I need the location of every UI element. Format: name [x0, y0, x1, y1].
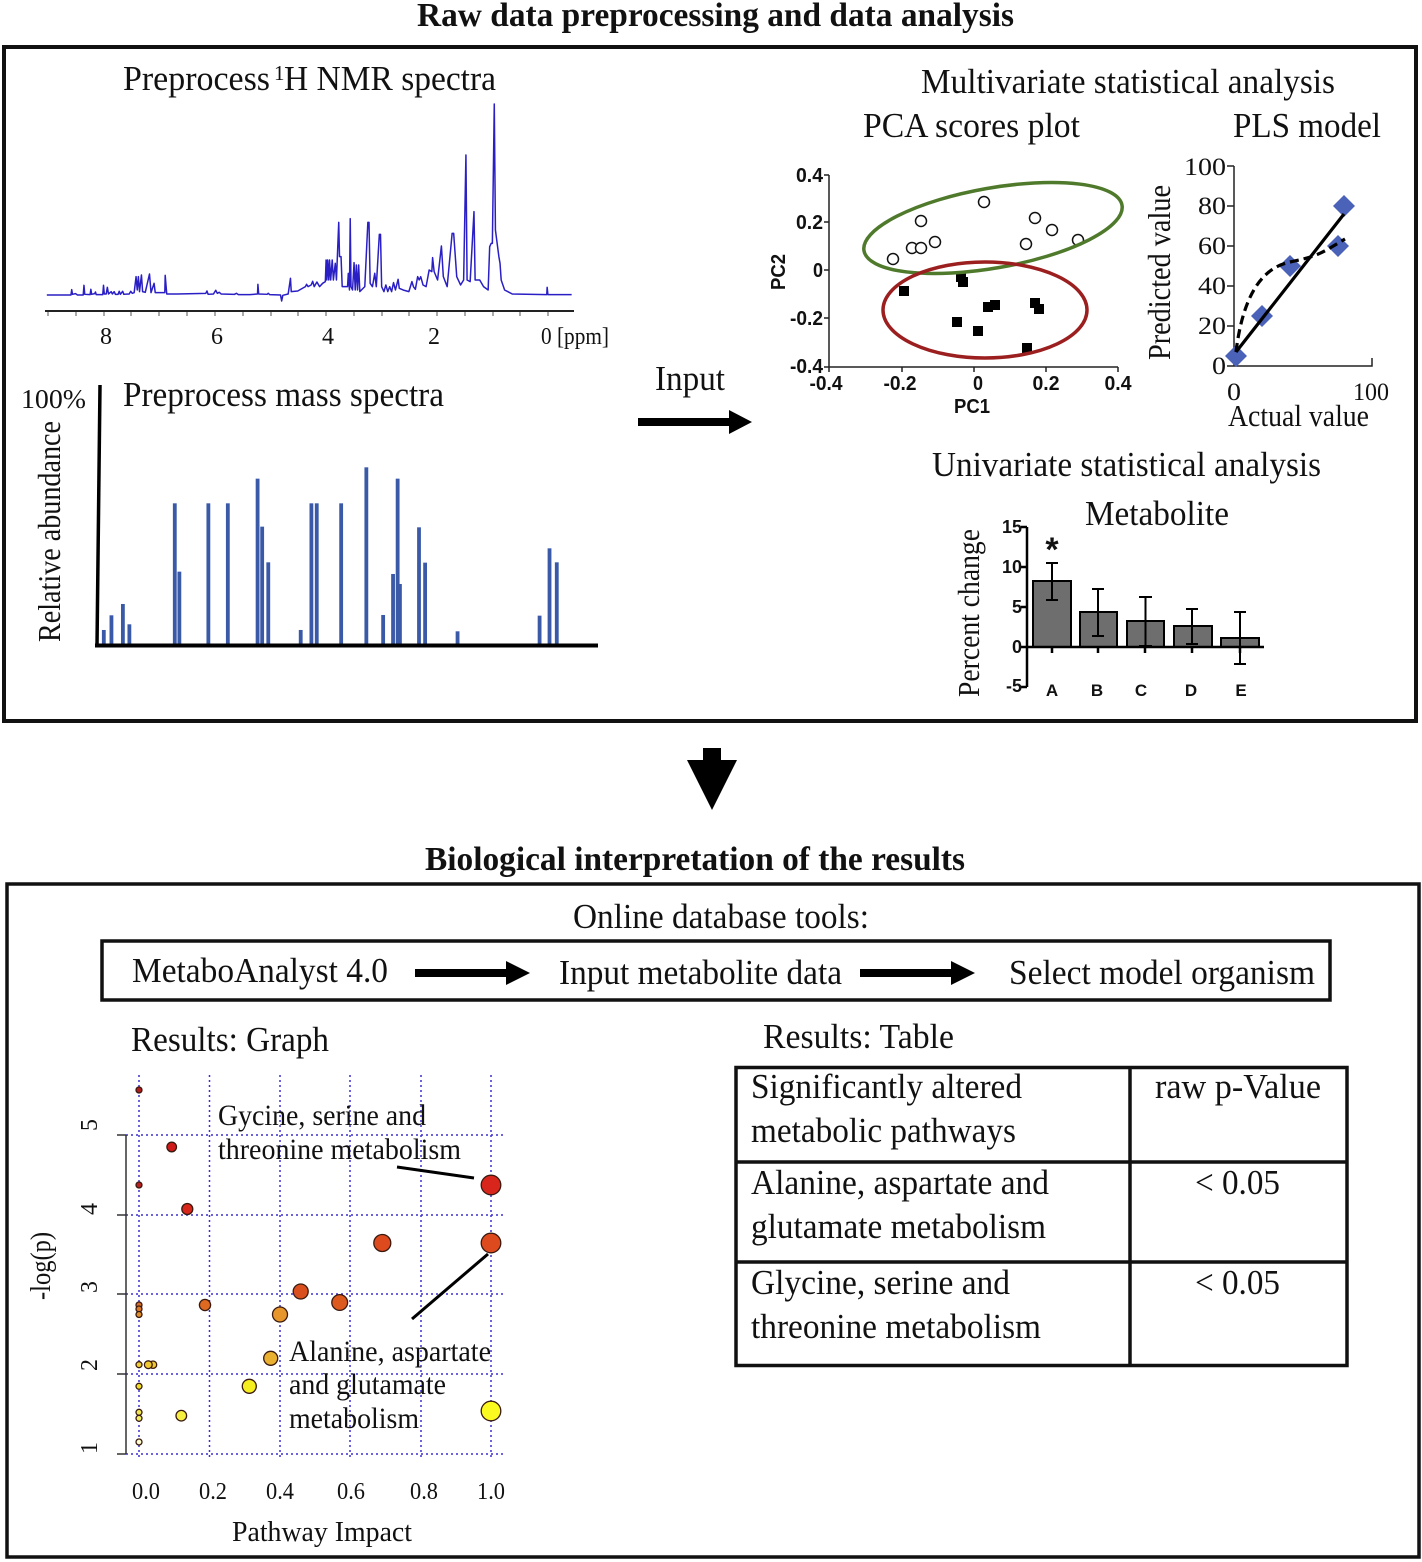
chart: pathway impact bubble plot: 4	[77, 1203, 103, 1215]
chart: pathway impact bubble plot: 2	[77, 1359, 103, 1371]
chart: PCA scores plot: 0.4	[1104, 373, 1132, 395]
table: significantly altered pathways	[736, 1067, 1347, 1366]
annotation: alanine pathway	[289, 1254, 491, 1435]
value: glycine p-value: < 0.05	[1195, 1263, 1280, 1302]
x axis label: pathway impact: Pathway Impact	[232, 1517, 412, 1548]
chart: pathway impact bubble plot: 0.4	[266, 1479, 294, 1505]
chart: PCA scores plot: -0.4	[810, 373, 843, 395]
chart: pathway impact bubble plot: 0.6	[337, 1479, 365, 1505]
heading: preprocess mass spectra: Preprocess mass spectra	[123, 375, 444, 414]
y axis label: predicted value: Predicted value	[1141, 185, 1177, 360]
annotation: glycine pathway	[218, 1099, 474, 1178]
pathway bubbles	[136, 1087, 501, 1445]
chart: pathway impact bubble plot: 0.0	[132, 1479, 160, 1505]
heading: PCA scores plot: PCA scores plot	[863, 106, 1080, 145]
chart: PCA scores plot: PC2	[768, 254, 790, 290]
chart: PLS model: 0	[1227, 379, 1241, 406]
annotation: alanine pathway: metabolism	[289, 1402, 419, 1435]
heading: PLS model: PLS model	[1233, 106, 1381, 145]
arrow: step 2 to 3	[860, 961, 975, 985]
chart: percent change bar chart: 5	[1012, 597, 1022, 617]
step: select model organism: Select model organism	[1009, 953, 1315, 992]
chart: PCA scores plot: -0.2	[884, 373, 916, 395]
chart: percent change bar chart: D	[1185, 681, 1197, 700]
arrow: down to biological interpretation	[687, 748, 737, 810]
chart: PCA scores plot: 0.4	[796, 165, 824, 187]
annotation: alanine pathway: Alanine, aspartate	[289, 1335, 491, 1368]
heading: results table: Results: Table	[763, 1017, 954, 1056]
x axis label: actual value: Actual value	[1228, 398, 1369, 433]
annotation: alanine pathway: and glutamate	[289, 1368, 446, 1401]
header cell: raw p-value: raw p-Value	[1155, 1067, 1321, 1106]
mass spectrum peaks	[102, 467, 559, 645]
heading: preprocess NMR spectra: 1	[274, 61, 284, 85]
y axis label: -log(p): -log(p)	[26, 1232, 57, 1300]
row: glycine pathway: Glycine, serine and	[751, 1263, 1010, 1302]
y axis label: relative abundance: Relative abundance	[31, 421, 67, 642]
heading: online database tools: Online database tools:	[573, 897, 869, 936]
chart: percent change bar chart: 15	[1002, 517, 1022, 537]
annotation: glycine pathway: threonine metabolism	[218, 1133, 461, 1166]
heading: preprocess NMR spectra: Preprocess	[123, 59, 270, 98]
chart: 1H NMR spectrum: 8	[100, 324, 112, 350]
annotation: glycine pathway: Gycine, serine and	[218, 1099, 426, 1132]
row: alanine pathway: Alanine, aspartate and	[751, 1163, 1049, 1202]
value: alanine p-value: < 0.05	[1195, 1163, 1280, 1202]
red ellipse	[883, 262, 1087, 358]
chart: pathway impact bubble plot: 0.8	[410, 1479, 438, 1505]
chart: PLS model: 20	[1198, 313, 1226, 340]
chart: PCA scores plot: -0.2	[790, 308, 823, 330]
arrow: input to statistical analysis	[638, 410, 752, 434]
dashed curve fit	[1236, 239, 1345, 352]
chart: PCA scores plot	[768, 165, 1132, 418]
y axis label: percent change: Percent change	[951, 529, 986, 697]
step: input metabolite data: Input metabolite data	[559, 953, 842, 992]
heading: preprocess NMR spectra	[123, 59, 496, 98]
solid linear fit	[1236, 214, 1344, 352]
chart: percent change bar chart: E	[1235, 681, 1247, 700]
chart: PLS model	[1141, 154, 1389, 433]
chart: PCA scores plot: 0.2	[1032, 373, 1060, 395]
chart: percent change bar chart: A	[1046, 681, 1058, 700]
significance asterisk: *	[1045, 531, 1059, 569]
chart: pathway impact bubble plot: 1.0	[477, 1479, 505, 1505]
chart: PLS model: 60	[1198, 233, 1226, 260]
group of open circle samples	[888, 196, 1084, 264]
row: glycine pathway: threonine metabolism	[751, 1307, 1041, 1346]
chart: percent change bar chart: B	[1091, 681, 1103, 700]
chart: percent change bar chart: 0	[1012, 637, 1022, 657]
heading: metabolite: Metabolite	[1085, 494, 1229, 533]
panel: biological interpretation of the results	[7, 884, 1419, 1557]
error bars	[1046, 563, 1246, 664]
chart: pathway impact bubble plot	[26, 1075, 506, 1548]
diamond data points	[1225, 195, 1355, 367]
chart: PLS model: 40	[1198, 273, 1226, 300]
heading: multivariate statistical analysis: Multivariate statistical analysis	[921, 62, 1335, 101]
chart: PLS model: 80	[1198, 193, 1226, 220]
chart: PLS model: 0	[1212, 353, 1226, 380]
chart: pathway impact bubble plot: 5	[77, 1119, 103, 1131]
chart: percent change bar chart	[951, 517, 1264, 700]
chart: PCA scores plot: 0	[973, 373, 983, 395]
arrow: step 1 to 2	[415, 961, 530, 985]
green ellipse	[857, 166, 1129, 290]
chart: pathway impact bubble plot: 3	[77, 1281, 103, 1293]
chart: PCA scores plot: 0.2	[796, 212, 823, 234]
chart: 1H NMR spectrum: 0 [ppm]	[541, 324, 609, 350]
heading: univariate statistical analysis: Univariate statistical analysis	[932, 445, 1321, 484]
chart: PCA scores plot: -0.4	[790, 356, 824, 378]
panel: raw data preprocessing and analysis	[4, 47, 1416, 721]
header cell: pathways: metabolic pathways	[751, 1111, 1016, 1150]
chart: pathway impact bubble plot: 1	[77, 1442, 103, 1454]
label: input: Input	[655, 359, 725, 398]
chart: percent change bar chart: -5	[1006, 676, 1022, 696]
workflow box	[102, 941, 1330, 1000]
chart: 1H NMR spectrum: 2	[428, 324, 440, 350]
header cell: pathways	[751, 1067, 1022, 1150]
heading: preprocess NMR spectra: H NMR spectra	[284, 59, 496, 98]
chart: PCA scores plot: 0	[813, 260, 823, 282]
group of filled square samples	[899, 272, 1044, 353]
row: glycine pathway	[751, 1263, 1041, 1346]
title: biological interpretation: Biological interpretation of the results	[425, 841, 965, 878]
chart: 1H NMR spectrum: 4	[322, 324, 334, 350]
row: alanine pathway: glutamate metabolism	[751, 1207, 1046, 1246]
chart: mass spectrum	[21, 375, 598, 646]
chart: 1H NMR spectrum	[45, 104, 609, 350]
chart: percent change bar chart: 10	[1002, 557, 1022, 577]
chart: PCA scores plot: PC1	[954, 396, 990, 418]
chart: 1H NMR spectrum: 6	[211, 324, 223, 350]
chart: pathway impact bubble plot: 0.2	[199, 1479, 227, 1505]
chart: percent change bar chart: C	[1135, 681, 1147, 700]
step: MetaboAnalyst: MetaboAnalyst 4.0	[132, 951, 388, 990]
header cell: pathways: Significantly altered	[751, 1067, 1022, 1106]
y axis top label: 100%	[21, 384, 86, 414]
chart: PLS model: 100	[1353, 379, 1389, 406]
row: alanine pathway	[751, 1163, 1049, 1246]
chart: PLS model: 100	[1184, 154, 1226, 181]
heading: results graph: Results: Graph	[131, 1020, 329, 1059]
